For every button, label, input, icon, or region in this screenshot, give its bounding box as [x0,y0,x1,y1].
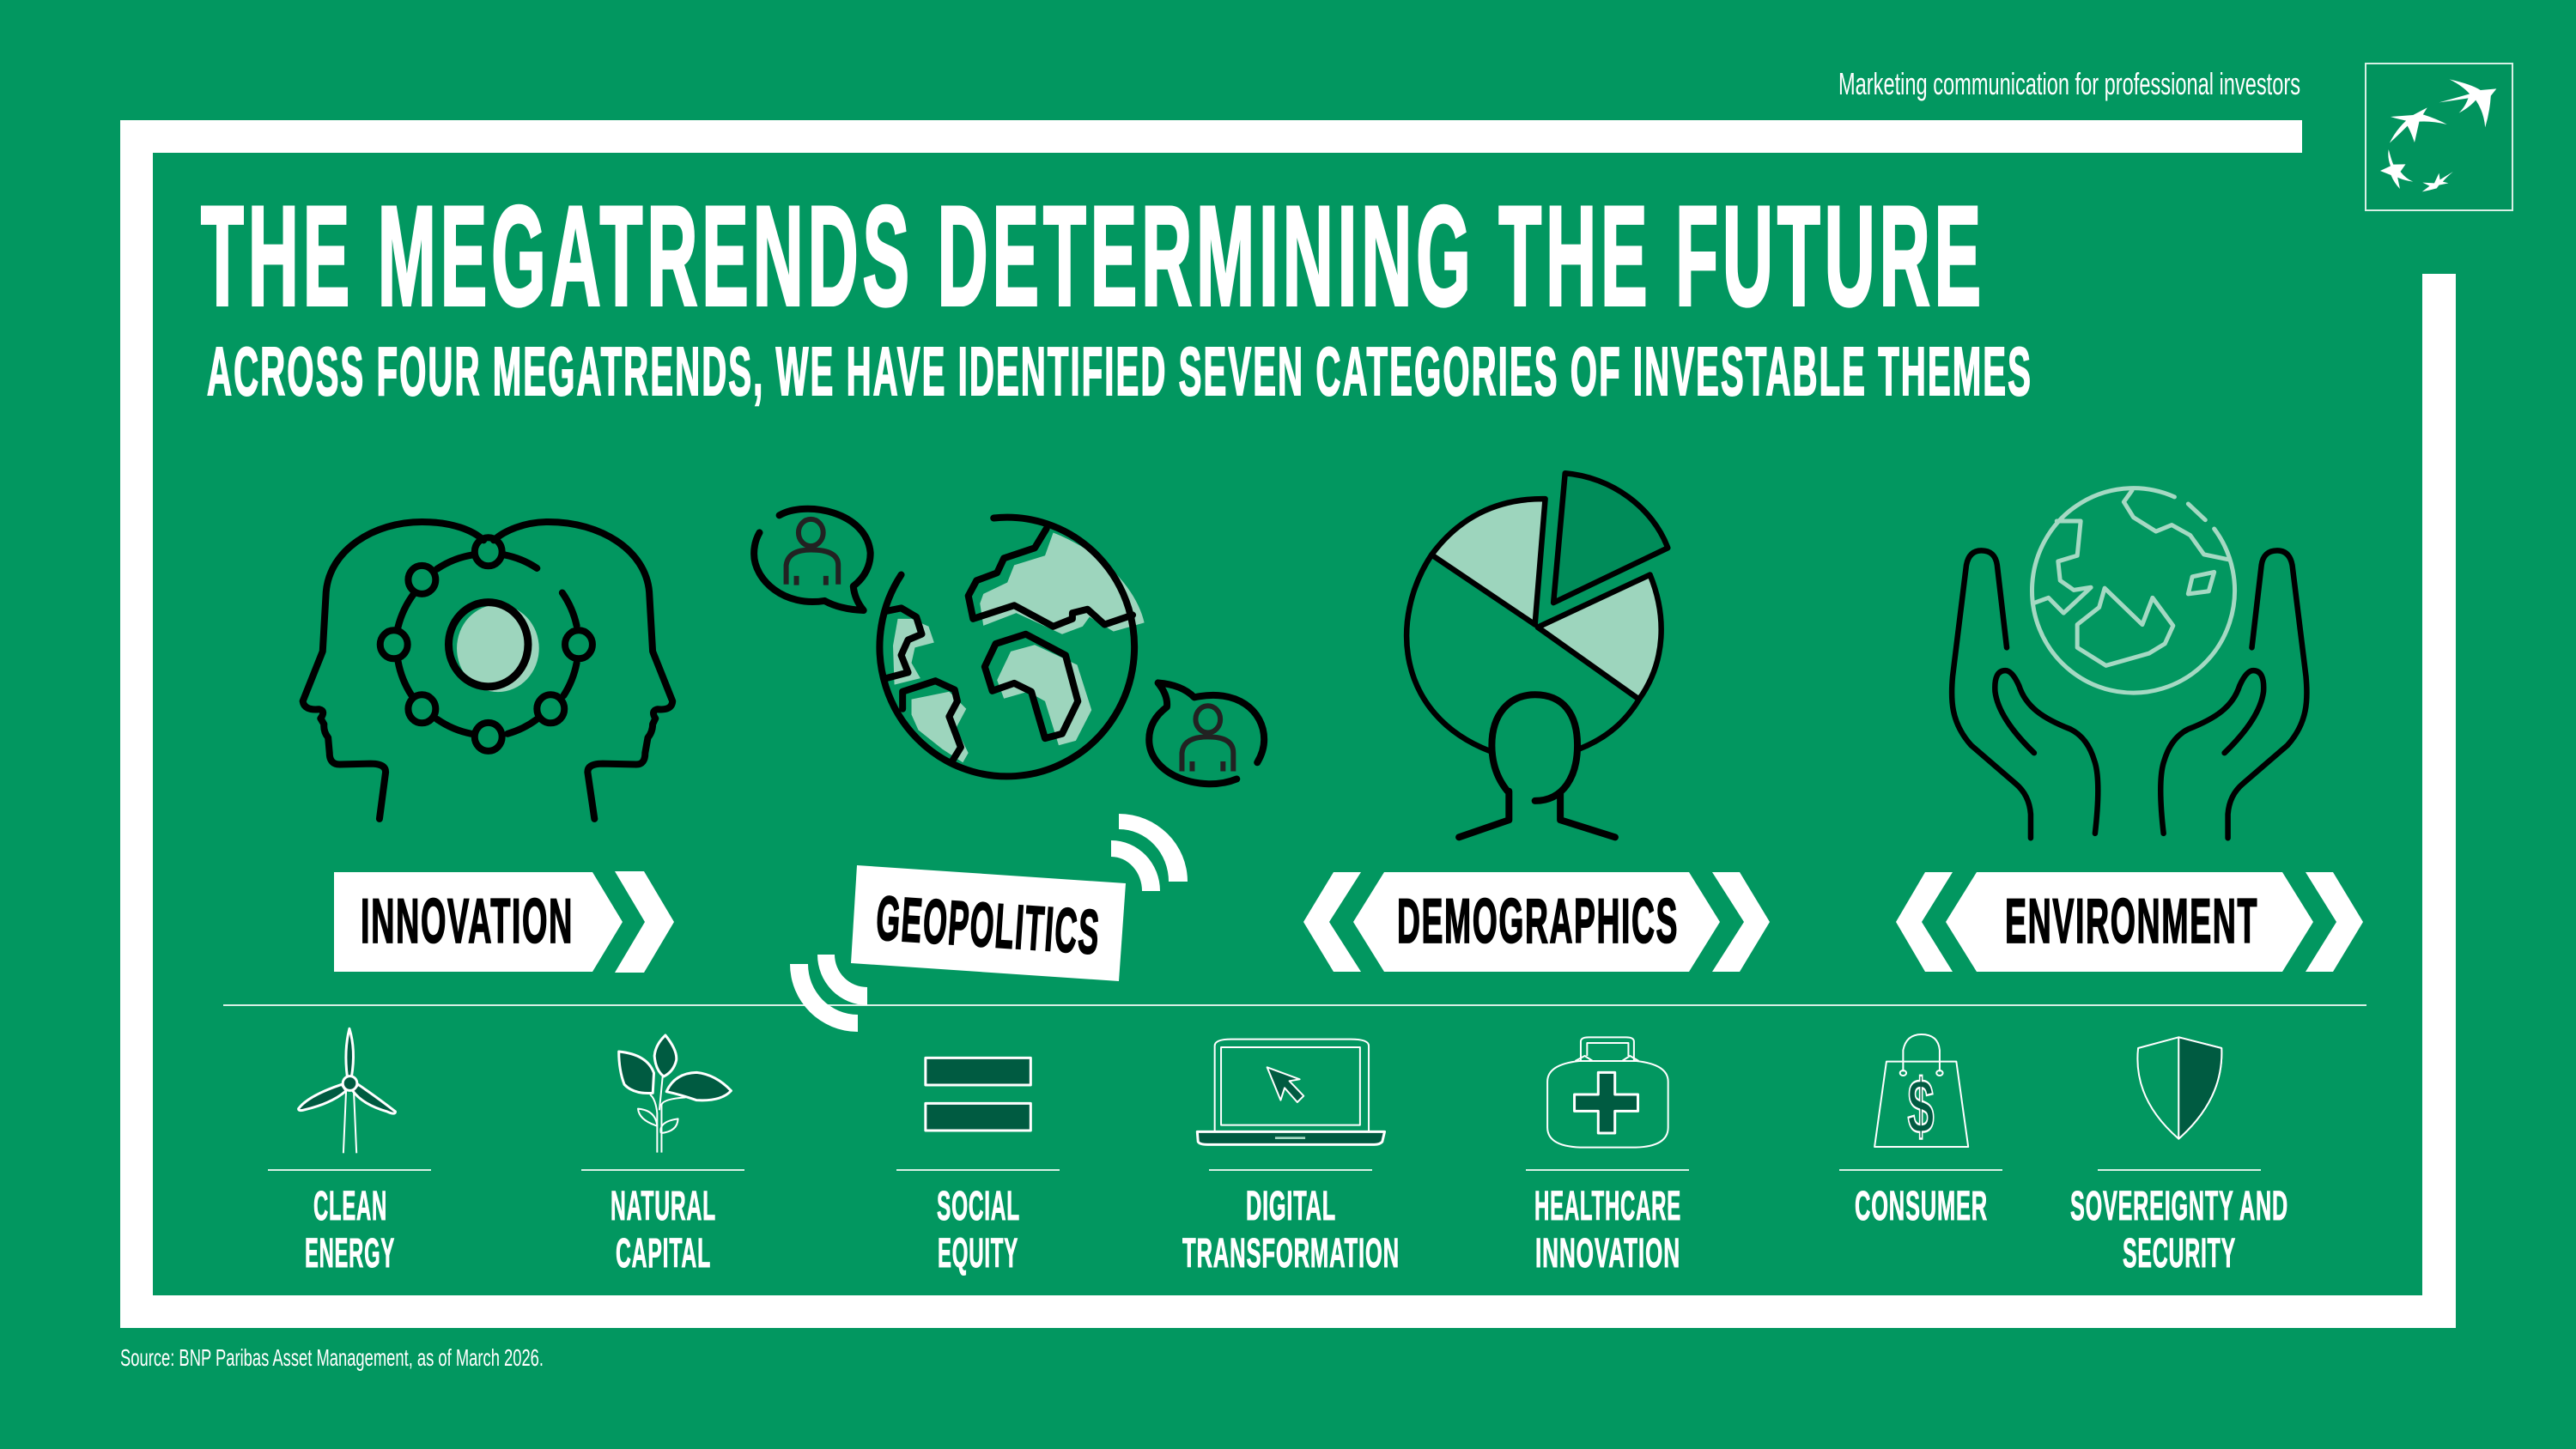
label: sovereignty and security: SECURITY [2123,1231,2236,1276]
label: sovereignty and security: SOVEREIGNTY AND [2070,1184,2288,1229]
icon: demographics pie chart head [1406,473,1668,837]
signal arcs: top right [1111,814,1188,891]
label: digital transformation: DIGITAL [1246,1184,1336,1229]
icon: shopping bag [1874,1034,1968,1147]
icon: wind turbine [299,1028,395,1153]
label: natural capital: CAPITAL [616,1231,711,1276]
logo: four birds [2366,64,2512,210]
speech bubble: upper left [754,509,871,610]
label: natural capital: NATURAL [611,1184,716,1229]
label: geopolitics: GEOPOLITICS [874,883,1103,967]
text: HEALTHCARE [1534,1184,1681,1229]
label: sovereignty and security [2070,1184,2288,1276]
signal arcs: bottom left [790,955,867,1032]
label: healthcare innovation: INNOVATION [1535,1231,1680,1276]
category rules [268,1169,2261,1171]
label: innovation [334,871,674,973]
icon: geopolitics globe with speech bubbles [754,509,1264,784]
icon: shield [2137,1037,2221,1139]
icon: innovation two heads with orbit [303,522,672,819]
label: geopolitics [851,814,1188,981]
icon: dollar sign: $ [1907,1063,1935,1149]
label: innovation: INNOVATION [361,887,574,956]
label: social equity: SOCIAL [937,1184,1020,1229]
globe in hands [2032,488,2235,693]
speech bubble: lower right [1149,682,1264,784]
icon: environment hands holding globe [1952,488,2307,838]
label: demographics: DEMOGRAPHICS [1397,887,1679,956]
label: clean energy: CLEAN [313,1184,387,1229]
text: ENERGY [305,1231,395,1276]
label: social equity [937,1184,1020,1276]
icon: equals sign [926,1058,1030,1131]
label: demographics [1303,872,1770,972]
icon: medical bag [1547,1037,1668,1148]
white frame [120,120,2456,1328]
label: environment [1896,872,2363,972]
label: digital transformation: TRANSFORMATION [1182,1231,1400,1276]
divider [223,1004,2366,1006]
icon: plant [619,1035,731,1153]
icon: laptop [1197,1040,1385,1144]
source note: Source: BNP Paribas Asset Management, as of March 2026. [120,1344,544,1371]
label: environment: ENVIRONMENT [2005,887,2258,956]
label: clean energy [305,1184,395,1276]
label: consumer: CONSUMER [1855,1184,1988,1229]
label: digital transformation [1182,1184,1400,1276]
label: healthcare innovation [1534,1184,1681,1276]
marketing notice: Marketing communication for professional investors [1838,66,2300,101]
label: natural capital [611,1184,716,1276]
label: social equity: EQUITY [938,1231,1018,1276]
